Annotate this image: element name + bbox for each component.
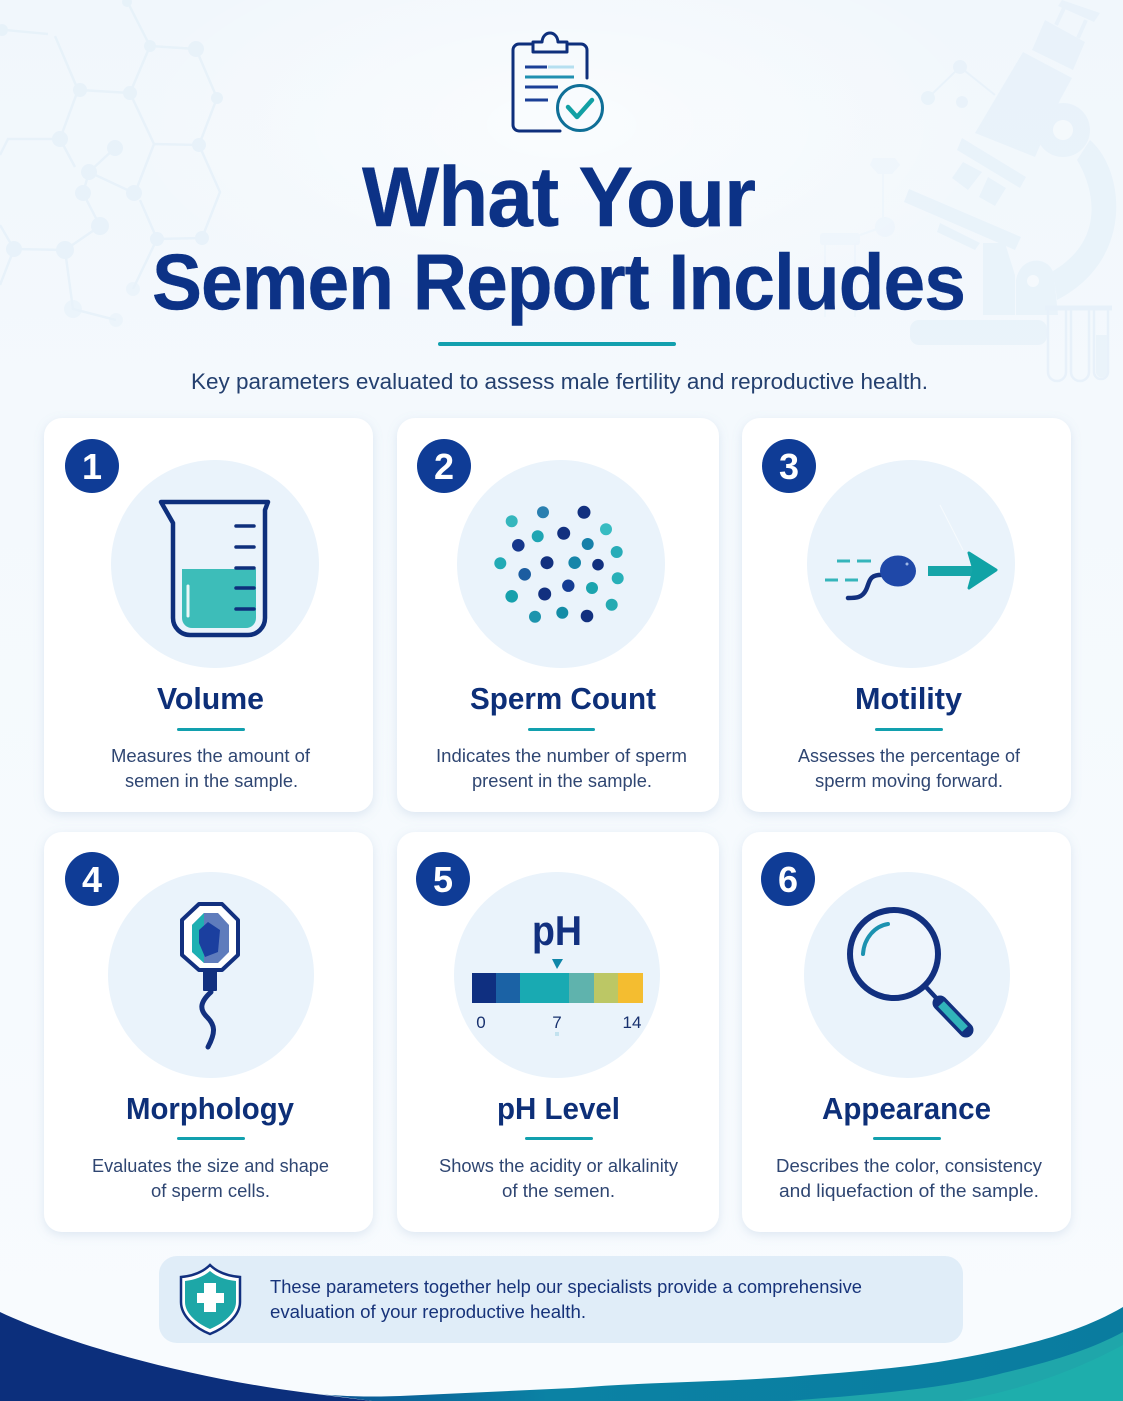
icon circle: pH	[454, 872, 660, 1078]
badge 6	[761, 852, 815, 906]
description: Appearance	[776, 1155, 1043, 1201]
icon: sperm cell shape	[182, 904, 238, 1047]
icon: shield with cross	[181, 1265, 240, 1334]
panel: Sperm Count	[397, 418, 719, 812]
badge 2: 2	[434, 446, 454, 487]
background: molecule pattern	[0, 0, 223, 327]
description: Morphology: of sperm cells.	[151, 1180, 270, 1201]
icon: beaker	[161, 502, 268, 635]
badge 4	[65, 852, 119, 906]
underline	[177, 728, 245, 731]
description: Appearance: and liquefaction of the sample.	[779, 1180, 1039, 1201]
description: pH Level: of the semen.	[502, 1180, 615, 1201]
callout	[159, 1256, 963, 1343]
icon: swimming sperm with arrow	[825, 505, 996, 598]
subtitle: Key parameters evaluated to assess male fertility and reproductive health.	[191, 369, 928, 394]
heading: pH Level: pH Level	[497, 1091, 620, 1126]
underline	[525, 1137, 593, 1140]
description: Volume	[111, 745, 311, 791]
description: Volume: Measures the amount of	[111, 745, 311, 766]
panel: Motility	[742, 418, 1071, 812]
description: Motility: Assesses the percentage of	[798, 745, 1021, 766]
description: Sperm Count	[436, 745, 687, 791]
badge 1	[65, 439, 119, 493]
icon: dots	[494, 506, 624, 623]
callout text: evaluation of your reproductive health.	[270, 1301, 586, 1322]
heading: Volume: Volume	[157, 681, 264, 716]
heading: Sperm Count: Sperm Count	[470, 681, 656, 716]
icon circle: motility	[807, 460, 1015, 668]
background: microscope and lab glassware	[820, 0, 1116, 381]
icon: clipboard with check	[513, 33, 602, 131]
underline	[875, 728, 943, 731]
icon circle: appearance	[804, 872, 1010, 1078]
badge 6: 6	[778, 859, 798, 900]
chart: pH scale: pH	[532, 907, 582, 954]
badge 2	[417, 439, 471, 493]
description: Volume: semen in the sample.	[125, 770, 298, 791]
heading: Appearance: Appearance	[822, 1091, 991, 1126]
badge 3	[762, 439, 816, 493]
description: Appearance: Describes the color, consistency	[776, 1155, 1043, 1176]
panel: Appearance	[742, 832, 1071, 1232]
underline	[177, 1137, 245, 1140]
badge 1: 1	[82, 446, 102, 487]
callout text: These parameters together help our specialists provide a comprehensive	[270, 1276, 862, 1297]
description: Sperm Count: present in the sample.	[472, 770, 652, 791]
heading: Motility: Motility	[855, 681, 963, 716]
panel: Morphology	[44, 832, 373, 1232]
description: Sperm Count: Indicates the number of sperm	[436, 745, 687, 766]
description: Morphology	[92, 1155, 329, 1201]
heading: Morphology: Morphology	[126, 1091, 295, 1126]
badge 4: 4	[82, 859, 102, 900]
chart: pH scale	[472, 907, 643, 1036]
badge 5: 5	[433, 859, 453, 900]
underline	[873, 1137, 941, 1140]
description: Motility: sperm moving forward.	[815, 770, 1003, 791]
title: What Your	[362, 150, 755, 244]
title underline	[438, 342, 676, 346]
description: pH Level	[439, 1155, 679, 1201]
panel: Volume	[44, 418, 373, 812]
underline	[528, 728, 595, 731]
description: Motility	[798, 745, 1021, 791]
icon circle: sperm count	[457, 460, 665, 668]
icon circle: morphology	[108, 872, 314, 1078]
badge 5	[416, 852, 470, 906]
panel: pH Level	[397, 832, 719, 1232]
title: Semen Report Includes	[152, 237, 965, 326]
callout text	[270, 1276, 862, 1322]
icon circle: volume	[111, 460, 319, 668]
icon: magnifying glass	[850, 910, 966, 1030]
chart: pH scale: 14	[623, 1013, 641, 1032]
chart: pH scale: 7	[552, 1013, 562, 1032]
title	[152, 150, 965, 326]
chart: pH scale: 0	[476, 1013, 486, 1032]
description: Morphology: Evaluates the size and shape	[92, 1155, 329, 1176]
description: pH Level: Shows the acidity or alkalinity	[439, 1155, 679, 1176]
bottom waves	[0, 1307, 1123, 1401]
badge 3: 3	[779, 446, 799, 487]
